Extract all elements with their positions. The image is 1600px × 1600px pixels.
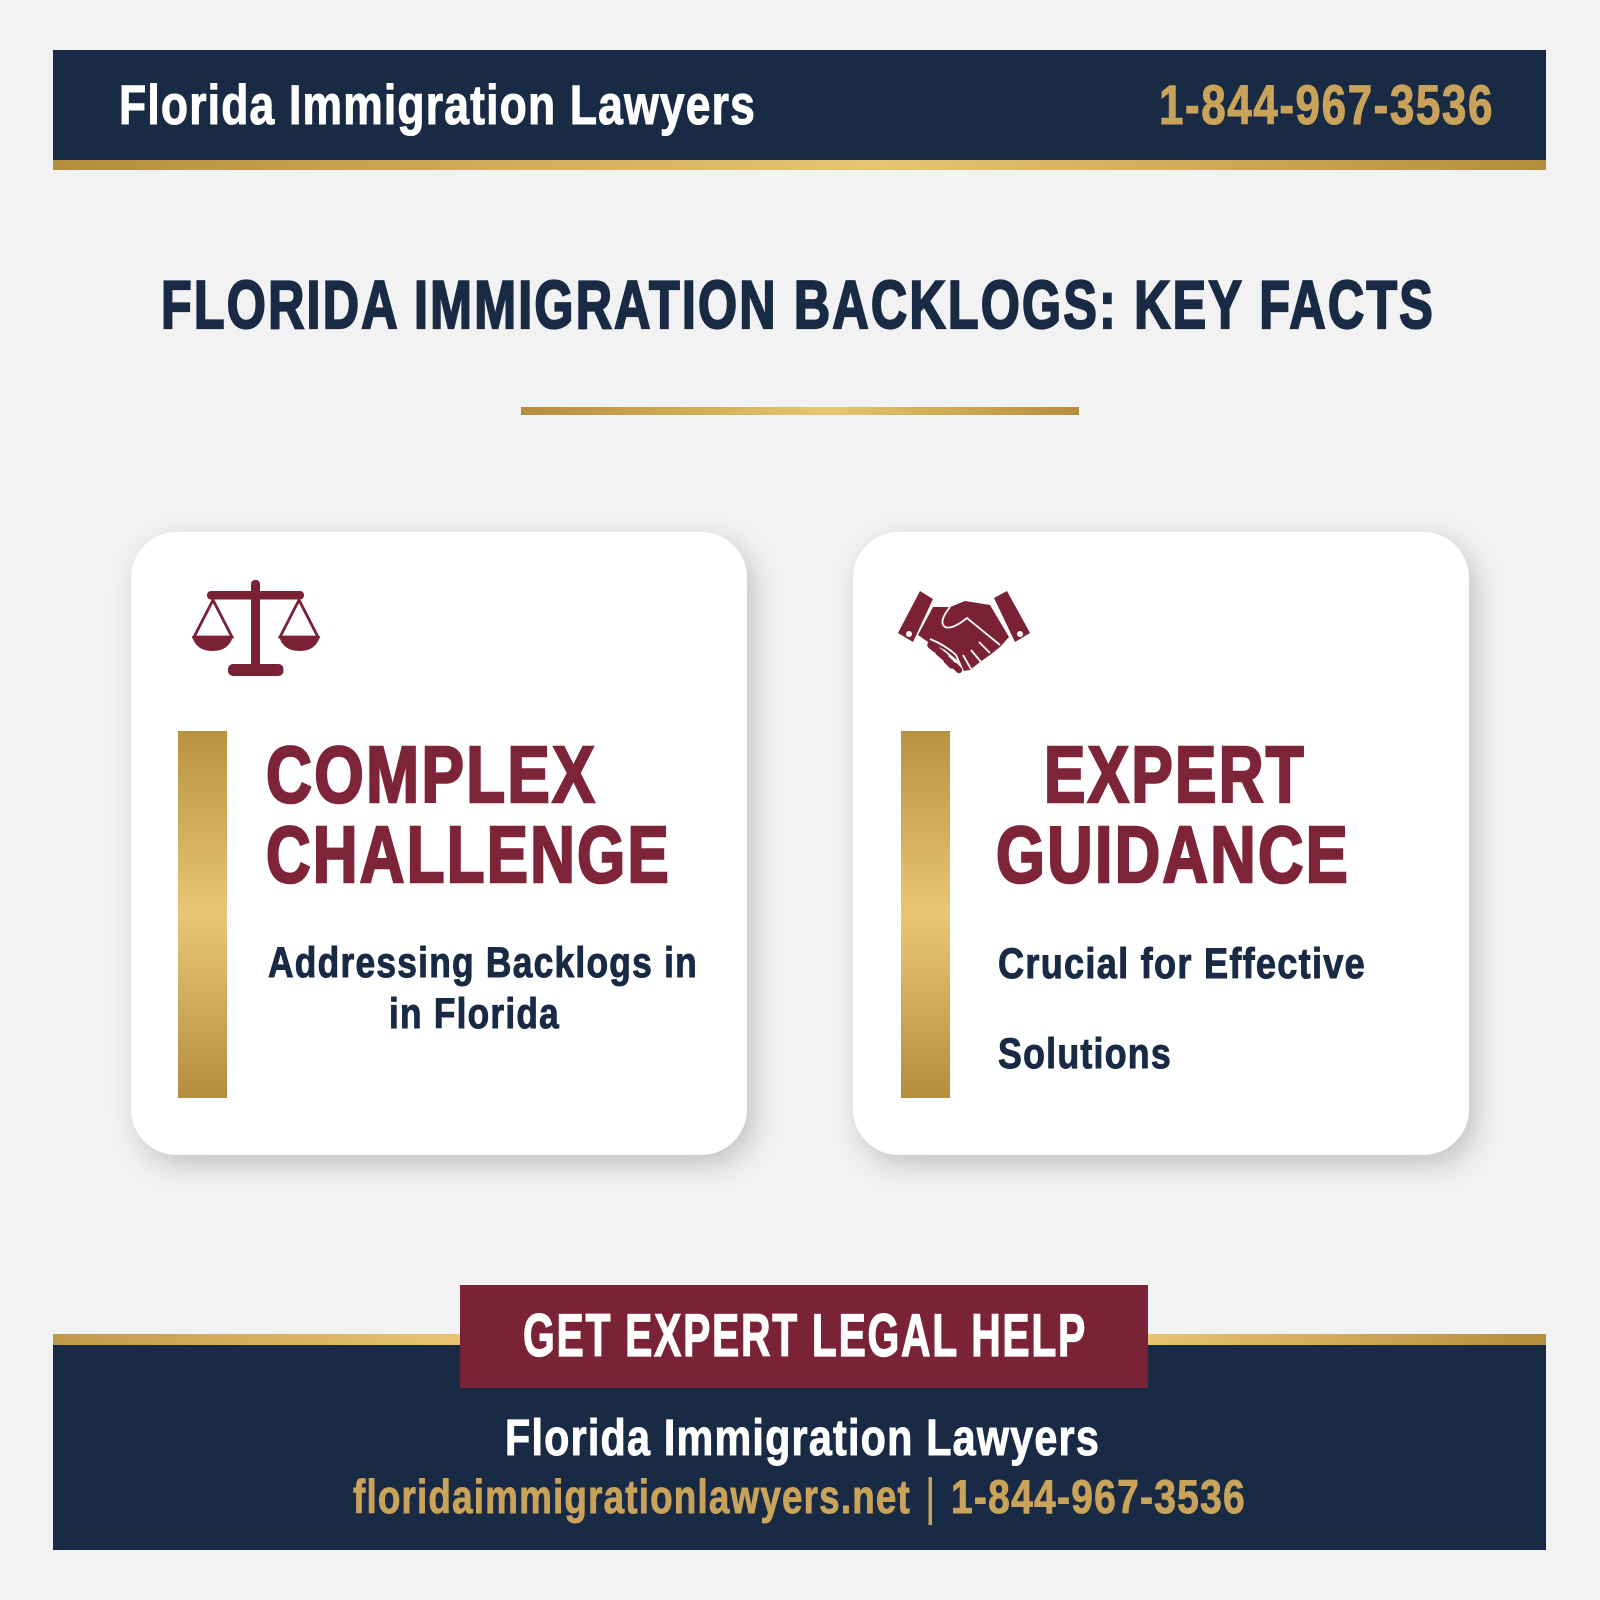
card body text: Solutions bbox=[998, 1030, 1172, 1078]
panel: expert guidance bbox=[853, 532, 1469, 1155]
card heading bbox=[996, 730, 1350, 899]
title divider bbox=[521, 407, 1079, 415]
card body text: Crucial for Effective bbox=[998, 940, 1366, 988]
card heading: GUIDANCE bbox=[996, 810, 1350, 899]
call to action banner bbox=[460, 1285, 1148, 1388]
icon: scales of justice bbox=[192, 580, 320, 676]
card body text: Addressing Backlogs in bbox=[268, 939, 698, 987]
footer bar bbox=[53, 1285, 1546, 1550]
card heading: COMPLEX bbox=[266, 730, 597, 819]
card body text bbox=[998, 940, 1366, 1078]
card heading bbox=[266, 730, 671, 899]
card body text bbox=[268, 939, 698, 1038]
card heading: CHALLENGE bbox=[266, 810, 671, 899]
panel: complex challenge bbox=[131, 532, 747, 1155]
gold accent bar bbox=[178, 731, 227, 1098]
gold accent bar bbox=[901, 731, 950, 1098]
header bar: Florida Immigration Lawyers bbox=[119, 73, 756, 136]
footer contact line: 1-844-967-3536 bbox=[951, 1470, 1246, 1523]
header bar bbox=[53, 50, 1546, 170]
icon: handshake bbox=[898, 591, 1030, 671]
header bar: 1-844-967-3536 bbox=[1159, 73, 1494, 136]
card body text: in Florida bbox=[389, 990, 560, 1038]
call to action banner: GET EXPERT LEGAL HELP bbox=[523, 1302, 1087, 1369]
card heading: EXPERT bbox=[1044, 730, 1306, 819]
footer contact line: floridaimmigrationlawyers.net bbox=[353, 1470, 911, 1523]
footer firm name: Florida Immigration Lawyers bbox=[505, 1409, 1100, 1466]
